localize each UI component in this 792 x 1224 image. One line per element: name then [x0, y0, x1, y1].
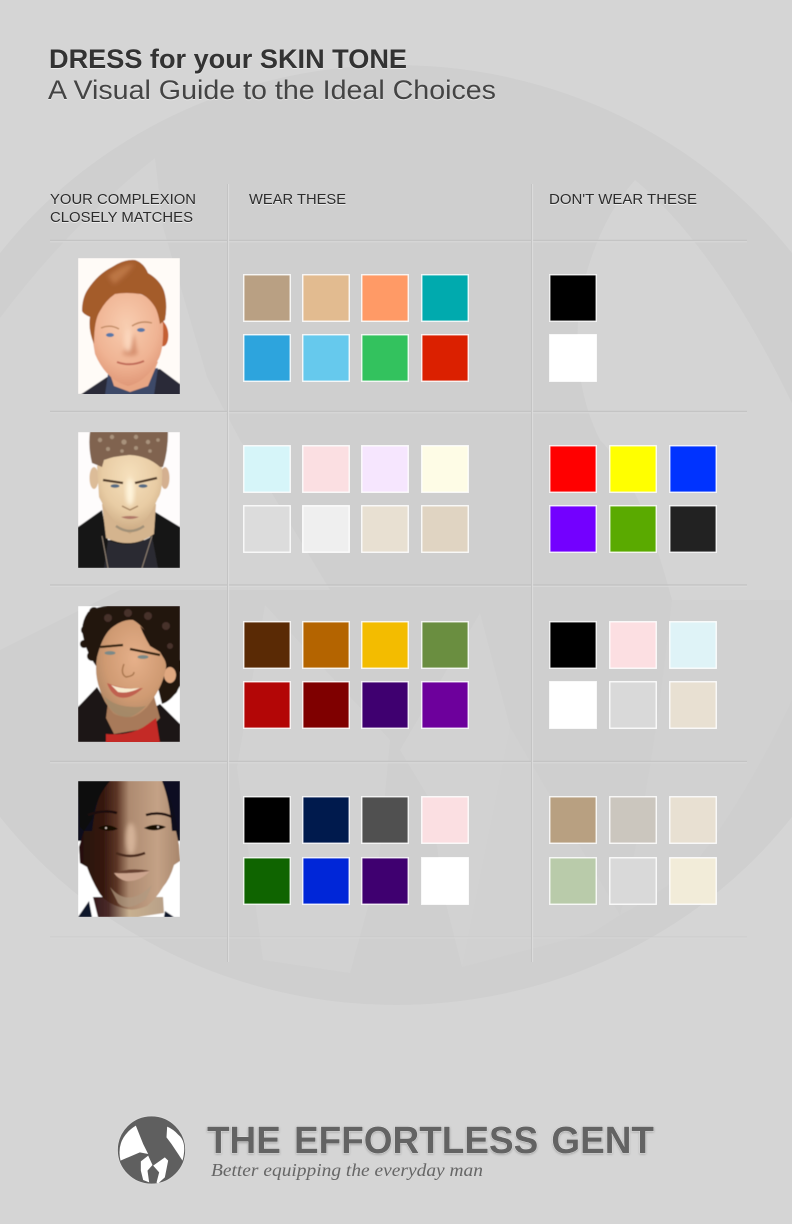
- row 4 wear swatches: [244, 797, 468, 904]
- heading: closely matches: CLOSELY MATCHES: [50, 210, 193, 226]
- row 3 wear swatches: [244, 622, 468, 728]
- table grid lines: [50, 184, 747, 962]
- row 2 wear swatches: [244, 446, 468, 552]
- heading: wear these: WEAR THESE: [249, 192, 346, 208]
- footer brand name: THE EFFORTLESS GENT: [207, 1120, 654, 1162]
- heading: don't wear these: DON'T WEAR THESE: [549, 192, 697, 208]
- row 2 avoid swatches: [550, 446, 716, 552]
- row 1 avoid swatches: [550, 275, 596, 381]
- title: [48, 44, 496, 105]
- photo: dark complexion: [78, 781, 180, 917]
- heading: subtitle: A Visual Guide to the Ideal Choices: [48, 75, 496, 105]
- footer tagline: Better equipping the everyday man: [211, 1160, 483, 1180]
- row 3 avoid swatches: [550, 622, 716, 728]
- column headings: [50, 192, 697, 226]
- photo: fair complexion: [78, 258, 180, 395]
- heading: main title: DRESS for your SKIN TONE: [49, 44, 407, 74]
- icon: footer logo: [118, 1116, 185, 1184]
- row 1 wear swatches: [244, 275, 468, 381]
- background watermark logo: [0, 65, 792, 1005]
- row 4 avoid swatches: [550, 797, 716, 904]
- photo: olive complexion: [78, 606, 183, 743]
- heading: your complexion: YOUR COMPLEXION: [50, 192, 196, 208]
- photo: light complexion: [78, 432, 180, 568]
